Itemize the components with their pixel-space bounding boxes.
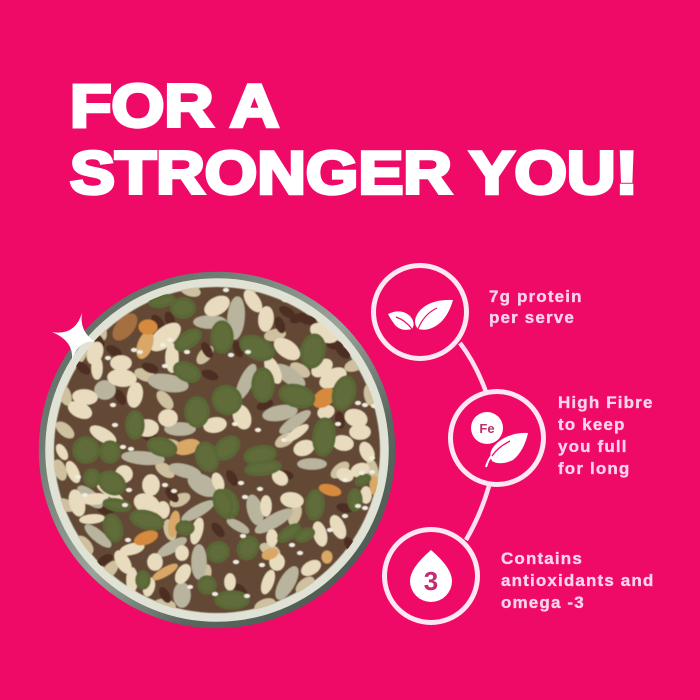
text: fibre remaining lines: for long: [558, 459, 630, 478]
text: protein second line: per serve: [489, 308, 575, 327]
panel: seed bowl: [42, 270, 392, 625]
icon: two leaves: [374, 266, 466, 358]
icon: sparkle: [52, 313, 95, 360]
text: omega: Contains: [501, 549, 583, 568]
title: [70, 72, 638, 206]
text: fibre: High Fibre: [558, 393, 654, 412]
seed mix: [51, 270, 380, 614]
text: fibre remaining lines: to keep: [558, 415, 626, 434]
title: FOR A: [70, 72, 279, 140]
connector: first to second circle: [460, 343, 486, 392]
title: STRONGER YOU!: [70, 140, 638, 206]
text: omega remaining lines: [501, 571, 654, 612]
icon: omega drop: [384, 530, 478, 622]
icon: omega drop: 3: [424, 566, 438, 596]
icon: iron and leaf: Fe: [479, 421, 495, 436]
feature: fibre: [450, 392, 654, 484]
text: omega remaining lines: omega -3: [501, 593, 585, 612]
large roasted almond: [112, 313, 138, 341]
feature: protein: [374, 266, 583, 358]
text: fibre remaining lines: [558, 415, 630, 478]
icon: iron and leaf: [450, 392, 544, 484]
text: omega remaining lines: antioxidants and: [501, 571, 654, 590]
feature: omega: [384, 530, 583, 622]
connector: second to third circle: [466, 486, 489, 540]
text: fibre remaining lines: you full: [558, 437, 628, 456]
text: protein: 7g protein: [489, 287, 583, 306]
bowl rim: [42, 275, 392, 625]
